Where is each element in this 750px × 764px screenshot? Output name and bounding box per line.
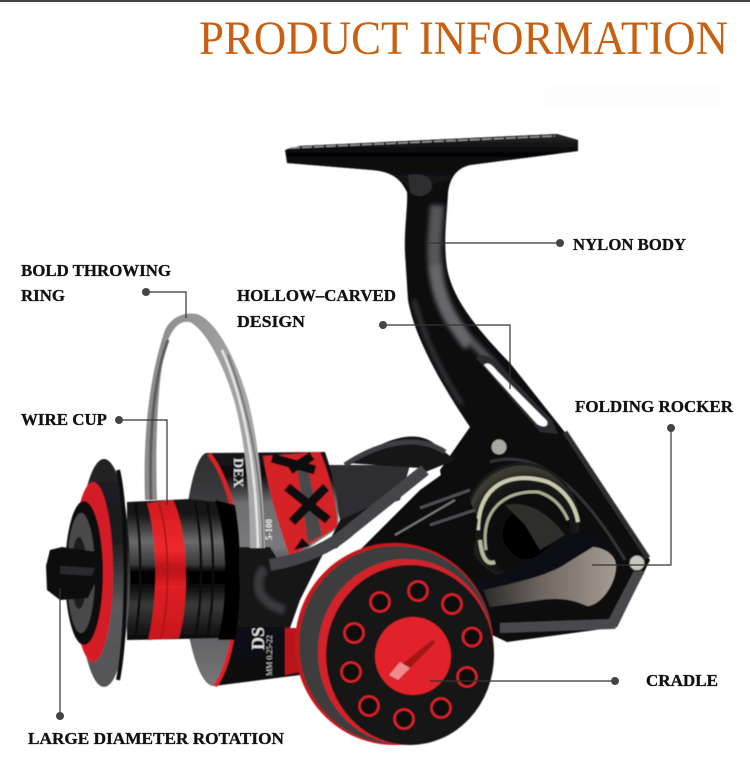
screw tip <box>629 555 645 571</box>
label: hollow-carved design: DESIGN <box>237 312 305 331</box>
hollow slot <box>484 364 547 426</box>
body opening with spring <box>466 464 578 580</box>
reel: folding lever <box>473 533 617 610</box>
reel: handle stem and foot <box>285 134 578 470</box>
cup grey face <box>183 454 238 686</box>
reel: rotor cup <box>183 452 338 686</box>
reel: rotor cup: MM 0.25-22 <box>265 635 274 676</box>
label: wire cup: WIRE CUP <box>21 410 107 429</box>
label: wire cup <box>21 410 167 505</box>
reel: spool body <box>127 499 240 640</box>
title: PRODUCT INFORMATION <box>199 12 728 65</box>
reel: rotor cup: 5-100 <box>264 519 274 540</box>
reel: rear cylinder <box>327 465 410 520</box>
spool knurled red band <box>147 500 186 640</box>
reel: rotor arm <box>239 436 478 628</box>
foot plate <box>287 134 578 190</box>
cap slot <box>389 640 436 680</box>
label: cradle: CRADLE <box>646 671 718 690</box>
faint watermark <box>545 85 720 108</box>
label: folding rocker <box>575 397 734 565</box>
label: nylon body: NYLON BODY <box>573 235 686 254</box>
gearbox link <box>330 465 478 600</box>
label: large diameter rotation <box>28 588 284 748</box>
lever metal face <box>483 547 616 607</box>
stem specular highlights <box>414 205 505 405</box>
center red cap <box>375 617 451 695</box>
label: hollow-carved design <box>237 286 510 389</box>
label: folding rocker: FOLDING ROCKER <box>575 397 734 416</box>
reel: spool front flange <box>46 459 130 687</box>
reel: body plate <box>440 427 650 642</box>
foot plate toothed edge <box>290 136 555 148</box>
fishing reel illustration <box>46 134 650 745</box>
foot gusset <box>408 174 432 196</box>
reel: handle knob <box>295 543 494 745</box>
reel: rotor cup: DS <box>248 627 268 650</box>
hollow slot frame <box>476 355 558 434</box>
label: cradle <box>430 671 718 690</box>
label: bold throwing ring: BOLD THROWING <box>21 261 171 280</box>
reel: bail wire <box>145 314 265 548</box>
label: bold throwing ring <box>21 261 186 318</box>
label: bold throwing ring: RING <box>21 286 65 305</box>
label: nylon body <box>428 235 686 254</box>
red X band <box>263 452 337 557</box>
label: hollow-carved design: HOLLOW–CARVED <box>237 286 396 305</box>
knob holes <box>342 582 481 728</box>
screw top <box>490 438 508 456</box>
cup lettering: DEX <box>230 458 245 488</box>
top bar <box>0 0 750 2</box>
drag knob <box>46 547 100 600</box>
label: large diameter rotation: LARGE DIAMETER ROTATION <box>28 729 284 748</box>
